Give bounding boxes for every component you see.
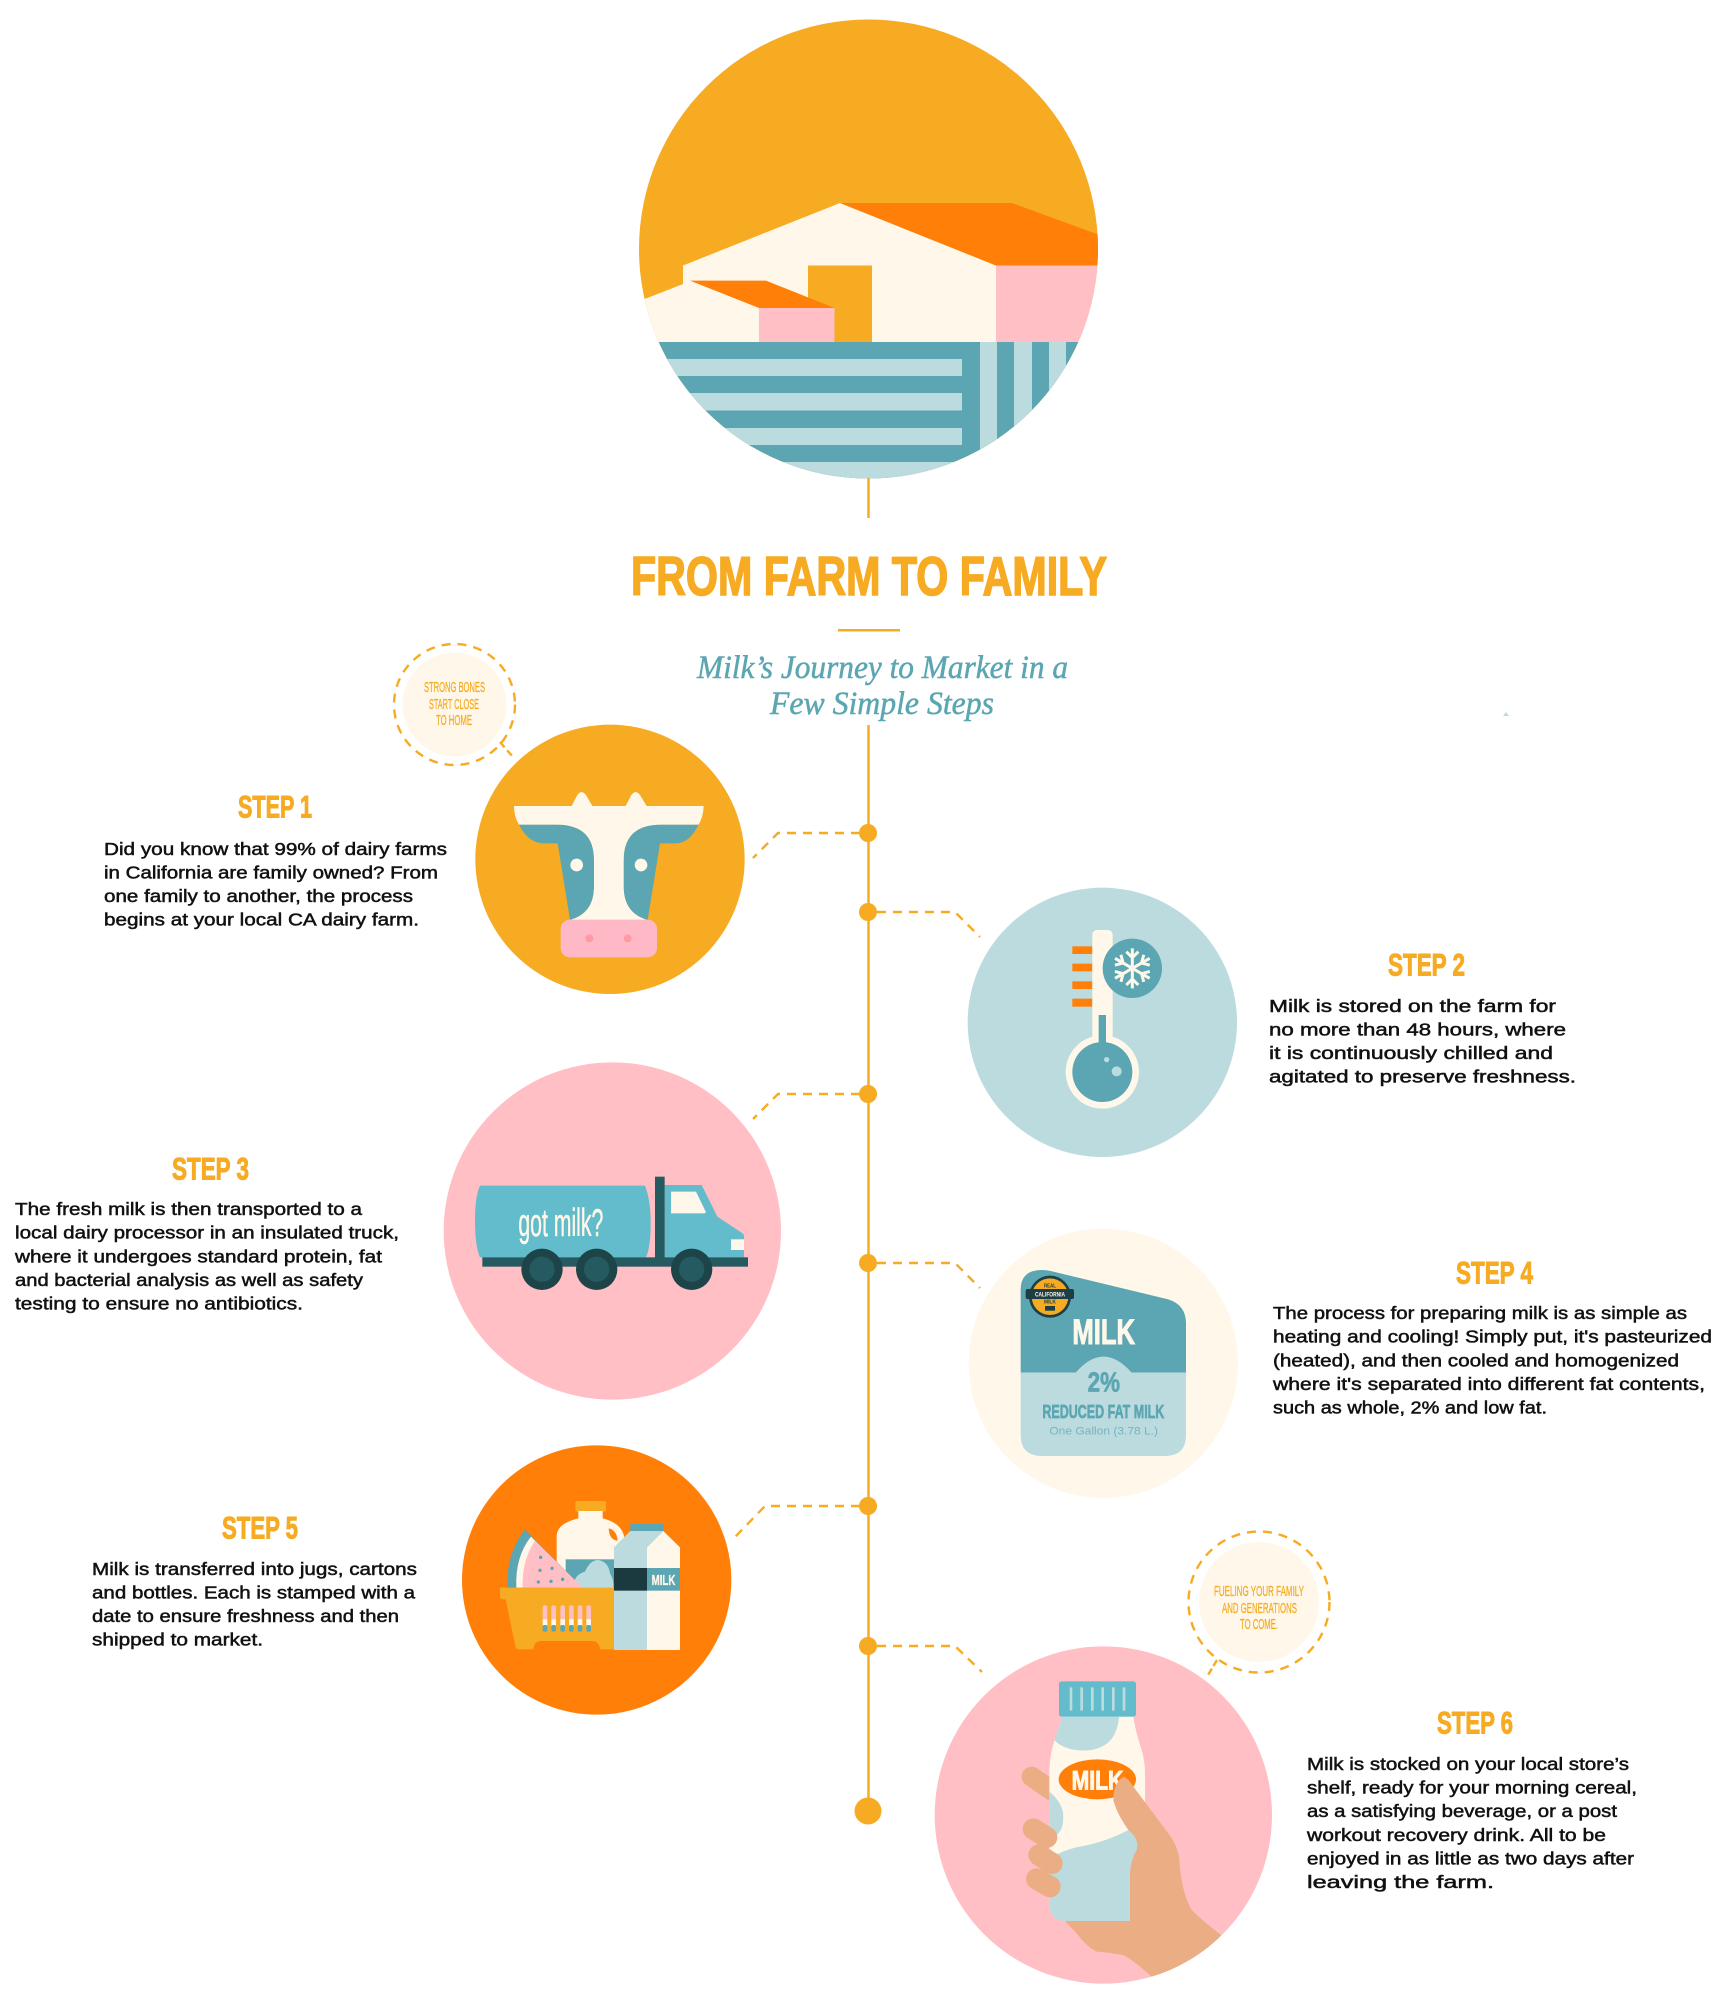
step 3 text: where it undergoes standard protein, fat xyxy=(14,1246,382,1266)
small speck xyxy=(1503,712,1509,716)
step 5 text: Milk is transferred into jugs, cartons xyxy=(92,1559,417,1579)
step 3 text: local dairy processor in an insulated truck, xyxy=(15,1223,399,1243)
step 5 text: and bottles. Each is stamped with a xyxy=(92,1582,415,1602)
step 2 text: agitated to preserve freshness. xyxy=(1269,1066,1576,1086)
step 4 text: The process for preparing milk is as simple as xyxy=(1273,1303,1687,1323)
step 1 text: in California are family owned? From xyxy=(104,862,438,882)
callout: fueling your family xyxy=(1188,1532,1330,1675)
step 6 text: enjoyed in as little as two days after xyxy=(1307,1848,1634,1868)
callout: strong bones xyxy=(394,644,515,765)
step 6 text xyxy=(1306,1704,1637,1892)
illustration: farm house in circle xyxy=(630,10,1110,490)
icon: cow xyxy=(475,725,745,994)
callout: strong bones: STRONG BONES xyxy=(424,679,485,696)
step 1 text: begins at your local CA dairy farm. xyxy=(104,910,419,930)
step 6 text: shelf, ready for your morning cereal, xyxy=(1307,1778,1637,1798)
step 1 text: one family to another, the process xyxy=(104,886,413,906)
step 2 text: no more than 48 hours, where xyxy=(1269,1020,1566,1040)
callout: fueling your family: TO COME. xyxy=(1240,1616,1278,1633)
subtitle xyxy=(696,650,1068,722)
callout: fueling your family: AND GENERATIONS xyxy=(1222,1600,1297,1617)
step 5 text: date to ensure freshness and then xyxy=(92,1606,399,1626)
subtitle: Few Simple Steps xyxy=(769,686,994,722)
step 6 text: Milk is stocked on your local store’s xyxy=(1307,1754,1629,1774)
icon: milk label xyxy=(969,1229,1238,1498)
step 3 text: and bacterial analysis as well as safety xyxy=(15,1270,363,1290)
step 2 text: it is continuously chilled and xyxy=(1269,1043,1553,1063)
timeline: vertical line top xyxy=(867,478,870,518)
step 3 text xyxy=(14,1150,399,1314)
step 5 text: STEP 5 xyxy=(222,1510,298,1546)
icon: milk truck xyxy=(444,1062,781,1400)
title: FROM FARM TO FAMILY xyxy=(631,545,1107,607)
icon: milk label: One Gallon (3.78 L.) xyxy=(1049,1425,1158,1437)
icon: milk label: MILK xyxy=(1072,1313,1135,1352)
step 4 text: heating and cooling! Simply put, it's pasteurized xyxy=(1273,1327,1712,1347)
step 2 text xyxy=(1269,946,1576,1086)
connectors: dashed leaders from timeline to steps xyxy=(735,833,982,1672)
icon: thermometer xyxy=(968,888,1237,1157)
step 3 text: The fresh milk is then transported to a xyxy=(15,1199,362,1219)
step 4 text: (heated), and then cooled and homogenized xyxy=(1273,1350,1679,1370)
step 5 text xyxy=(92,1510,417,1650)
icon: basket, jug and carton xyxy=(462,1445,731,1715)
step 2 text: Milk is stored on the farm for xyxy=(1269,996,1556,1016)
step 6 text: STEP 6 xyxy=(1437,1704,1513,1740)
icon: milk label: REAL xyxy=(1044,1284,1057,1290)
subtitle: Milk’s Journey to Market in a xyxy=(696,650,1068,686)
icon: hand holding milk bottle: MILK xyxy=(1072,1765,1123,1795)
step 4 text: such as whole, 2% and low fat. xyxy=(1273,1398,1547,1418)
callout: strong bones: START CLOSE xyxy=(429,696,479,713)
timeline: main vertical line with dots xyxy=(854,725,882,1824)
step 4 text: STEP 4 xyxy=(1456,1254,1533,1290)
icon: basket, jug and carton: MILK xyxy=(652,1572,675,1589)
callout: fueling your family: FUELING YOUR FAMILY xyxy=(1214,1583,1304,1600)
divider xyxy=(838,629,900,632)
step 1 text xyxy=(104,788,447,930)
step 6 text: as a satisfying beverage, or a post xyxy=(1307,1801,1617,1821)
icon: hand holding milk bottle xyxy=(935,1646,1272,1984)
step 6 text: workout recovery drink. All to be xyxy=(1306,1825,1606,1845)
step 6 text: leaving the farm. xyxy=(1307,1872,1494,1892)
step 3 text: testing to ensure no antibiotics. xyxy=(15,1294,303,1314)
callout: strong bones: TO HOME xyxy=(436,712,472,729)
step 3 text: STEP 3 xyxy=(172,1150,249,1186)
icon: milk label: CALIFORNIA xyxy=(1035,1292,1066,1298)
step 1 text: STEP 1 xyxy=(238,788,312,824)
step 4 text xyxy=(1272,1254,1712,1418)
icon: milk truck: got milk? xyxy=(518,1201,603,1245)
icon: milk label: 2% xyxy=(1088,1367,1120,1398)
icon: milk label: REDUCED FAT MILK xyxy=(1042,1401,1165,1422)
step 5 text: shipped to market. xyxy=(92,1630,263,1650)
step 2 text: STEP 2 xyxy=(1388,946,1465,982)
step 4 text: where it's separated into different fat contents, xyxy=(1272,1374,1705,1394)
icon: milk label: MILK xyxy=(1044,1300,1056,1306)
step 1 text: Did you know that 99% of dairy farms xyxy=(104,839,447,859)
